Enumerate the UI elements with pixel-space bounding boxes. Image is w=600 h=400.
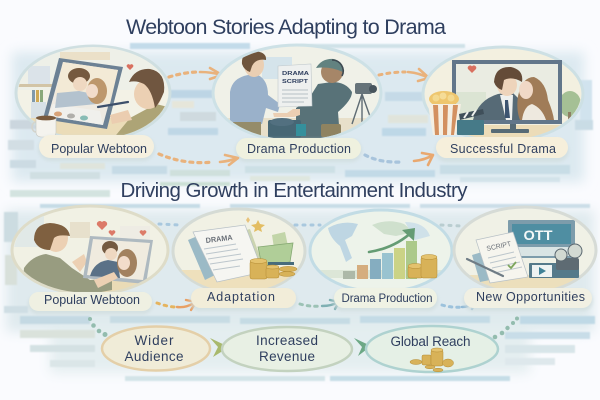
- oval: wider audience: [102, 326, 210, 370]
- icon: gold coins: [250, 258, 297, 279]
- label: drama production: [235, 138, 362, 162]
- arrow: webtoon label to production label: [159, 154, 238, 165]
- connector dots: global reach to right: [493, 316, 519, 339]
- label: drama production (lower): [333, 288, 438, 311]
- oval: global reach: Global Reach: [390, 334, 470, 349]
- label: adaptation: Adaptation: [207, 290, 275, 304]
- icon: clapperboard: [457, 109, 484, 135]
- panel: drama production: [213, 45, 381, 143]
- icon: drama script sheet: DRAMA: [282, 71, 310, 77]
- illustration: drama on tv with popcorn: [452, 60, 580, 137]
- icon: drama script sheet: SCRIPT: [282, 79, 309, 85]
- panel: popular webtoon (lower): [12, 206, 170, 295]
- icon: heart: [127, 64, 133, 70]
- label: new opportunities: [463, 288, 593, 311]
- connector dots: webtoon to adaptation: [159, 224, 180, 225]
- icon: star: [251, 220, 265, 232]
- illustration: world map and growth bars: [315, 221, 445, 279]
- title: Webtoon Stories Adapting to Drama: [126, 15, 446, 39]
- icon: script page: [476, 232, 528, 283]
- oval: increased revenue: Increased: [256, 333, 318, 348]
- subtitle: Driving Growth in Entertainment Industry: [120, 179, 468, 202]
- icon: video player and film camera: [529, 244, 582, 278]
- arrow: lower production to opportunities: [442, 301, 475, 309]
- icon: pen: [467, 259, 503, 276]
- icon: drama script sheet: [278, 64, 312, 107]
- arrow: production to successful drama: [379, 69, 429, 81]
- panel: adaptation: [173, 209, 306, 294]
- icon: popcorn bucket: [428, 91, 461, 135]
- icon: growth arrow: [369, 228, 415, 252]
- arrow: lower webtoon to adaptation: [157, 300, 196, 310]
- illustration: ott and script: [470, 220, 580, 288]
- label: drama production: Drama Production: [247, 142, 351, 156]
- label: popular webtoon (lower): Popular Webtoon: [44, 293, 140, 307]
- label: successful drama: [435, 137, 569, 162]
- arrow: webtoon to production: [169, 68, 222, 79]
- oval: increased revenue: Revenue: [259, 349, 315, 364]
- icon: drama paper: DRAMA: [205, 233, 234, 245]
- oval: wider audience: Wider: [134, 333, 174, 348]
- oval: global reach: [366, 326, 498, 372]
- panel: new opportunities: [454, 207, 597, 293]
- panel: successful drama: [423, 47, 583, 145]
- label: adaptation: [190, 288, 297, 311]
- label: popular webtoon: [38, 135, 155, 161]
- connector dots: production to opportunities: [441, 225, 462, 226]
- label: successful drama: Successful Drama: [450, 142, 556, 156]
- arrow: adaptation to lower production: [300, 300, 339, 309]
- label: popular webtoon: Popular Webtoon: [51, 142, 147, 156]
- connector dots: left to wider audience: [88, 317, 108, 337]
- oval: wider audience: Audience: [124, 349, 184, 364]
- arrow: production label to successful drama label: [365, 153, 433, 165]
- icon: coffee mug: [32, 116, 56, 137]
- label: popular webtoon (lower): [28, 292, 153, 314]
- illustration: drama script with money: [182, 229, 296, 288]
- connector dots: adaptation to production: [295, 224, 320, 226]
- text: OTT sign: OTT: [524, 227, 553, 243]
- illustration: crew with drama script: [228, 52, 377, 138]
- icon: coin stacks: [408, 254, 437, 278]
- panel: popular webtoon: [16, 45, 172, 143]
- arrow: wider audience to increased revenue: [210, 338, 229, 357]
- arrow: increased revenue to global reach: [354, 338, 371, 356]
- label: drama production (lower): Drama Production: [342, 293, 432, 305]
- panel: drama production (lower): [310, 210, 452, 292]
- illustration: artist drawing on tablet: [18, 47, 165, 135]
- oval: increased revenue: [222, 327, 352, 371]
- label: new opportunities: New Opportunities: [476, 290, 585, 304]
- icon: gold coins: [410, 348, 454, 372]
- icons: hearts: [97, 221, 146, 236]
- illustration: reader with tablet: [14, 216, 153, 292]
- icon: script page: SCRIPT: [486, 241, 513, 253]
